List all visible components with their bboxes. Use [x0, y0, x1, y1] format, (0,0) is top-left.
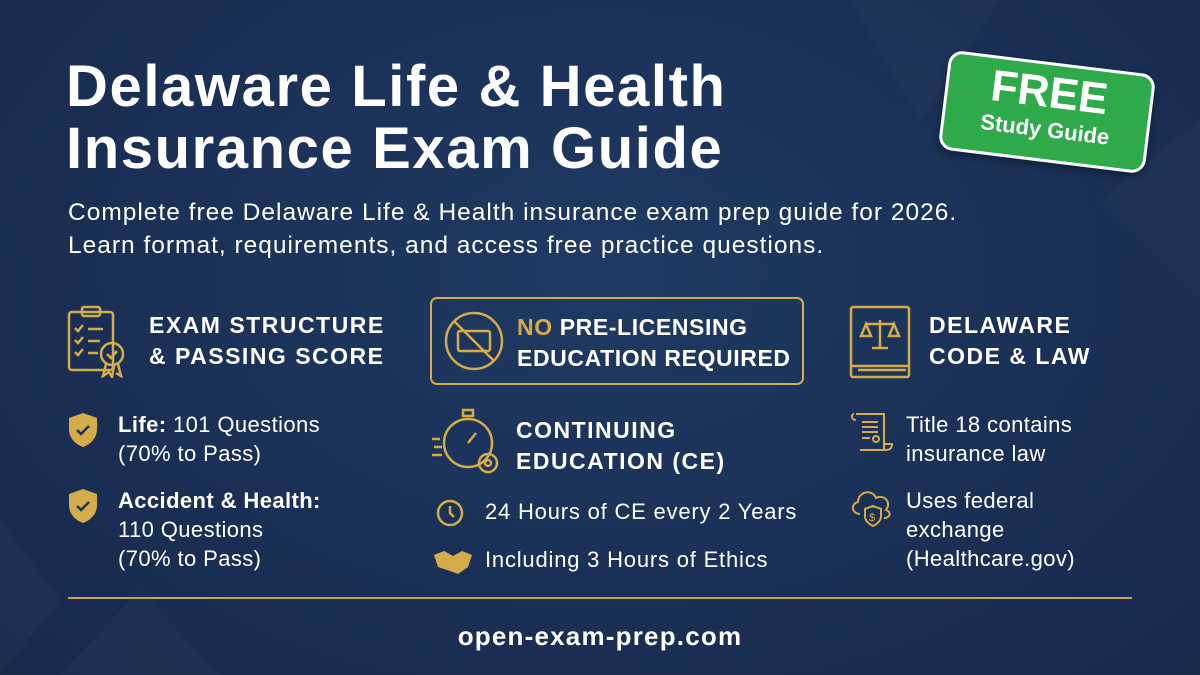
panel: exam structure: 110 Questions: [118, 517, 263, 542]
panel: delaware code & law: $: [869, 512, 875, 524]
footer url: open-exam-prep.com: [458, 621, 742, 651]
item: 24 hours: [436, 499, 797, 526]
panel: delaware code & law: DELAWARE: [929, 312, 1071, 338]
icon: stopwatch gear: [432, 408, 498, 474]
badge: FREE study guide: [938, 50, 1156, 174]
title: Insurance Exam Guide: [66, 116, 723, 181]
item: title 18: [850, 412, 1072, 466]
subtitle: Learn format, requirements, and access free practice questions.: [68, 232, 824, 259]
panel: exam structure: [68, 306, 385, 571]
item: accident & health: [69, 488, 321, 571]
panel: delaware code & law: CODE & LAW: [929, 343, 1091, 369]
callout: no pre-licensing: EDUCATION REQUIRED: [517, 345, 791, 371]
heading: [149, 312, 385, 369]
panel: exam structure: Life: 101 Questions: [118, 412, 320, 437]
heading: & PASSING SCORE: [149, 343, 384, 369]
title: Delaware Life & Health: [66, 54, 727, 119]
panel: delaware code & law: exchange: [906, 517, 1005, 542]
panel: continuing education: 24 Hours of CE every 2 Years: [485, 499, 797, 524]
icon: no certificate: [444, 312, 504, 370]
callout: no pre-licensing: NO PRE-LICENSING: [517, 314, 748, 340]
panel: exam structure: (70% to Pass): [118, 546, 261, 571]
panel: continuing education: [432, 408, 797, 574]
heading: EXAM STRUCTURE: [149, 312, 385, 338]
badge: FREE study guide: FREE: [988, 61, 1111, 124]
heading: EDUCATION (CE): [516, 448, 726, 474]
panel: exam structure: (70% to Pass): [118, 441, 261, 466]
subtitle: Complete free Delaware Life & Health insurance exam prep guide for 2026.: [68, 199, 957, 226]
title: [66, 54, 727, 181]
icon: clipboard: [68, 306, 124, 378]
panel: delaware code & law: Uses federal: [906, 488, 1034, 513]
item: ethics: [434, 547, 768, 574]
heading: CONTINUING: [516, 417, 677, 443]
item: life: [69, 412, 320, 466]
panel: delaware code & law: insurance law: [906, 441, 1046, 466]
panel: delaware code & law: [850, 306, 1091, 571]
item: federal exchange: [852, 488, 1075, 571]
badge: FREE study guide: Study Guide: [979, 109, 1111, 150]
divider: [68, 597, 1132, 599]
heading: [516, 417, 726, 474]
panel: delaware code & law: (Healthcare.gov): [906, 546, 1075, 571]
subtitle: [68, 199, 957, 259]
panel: delaware code & law: Title 18 contains: [906, 412, 1072, 437]
icon: law book: [850, 306, 910, 378]
callout: no pre-licensing: [430, 297, 804, 385]
panel: exam structure: Accident & Health:: [118, 488, 321, 513]
panel: continuing education: Including 3 Hours of Ethics: [485, 547, 768, 572]
